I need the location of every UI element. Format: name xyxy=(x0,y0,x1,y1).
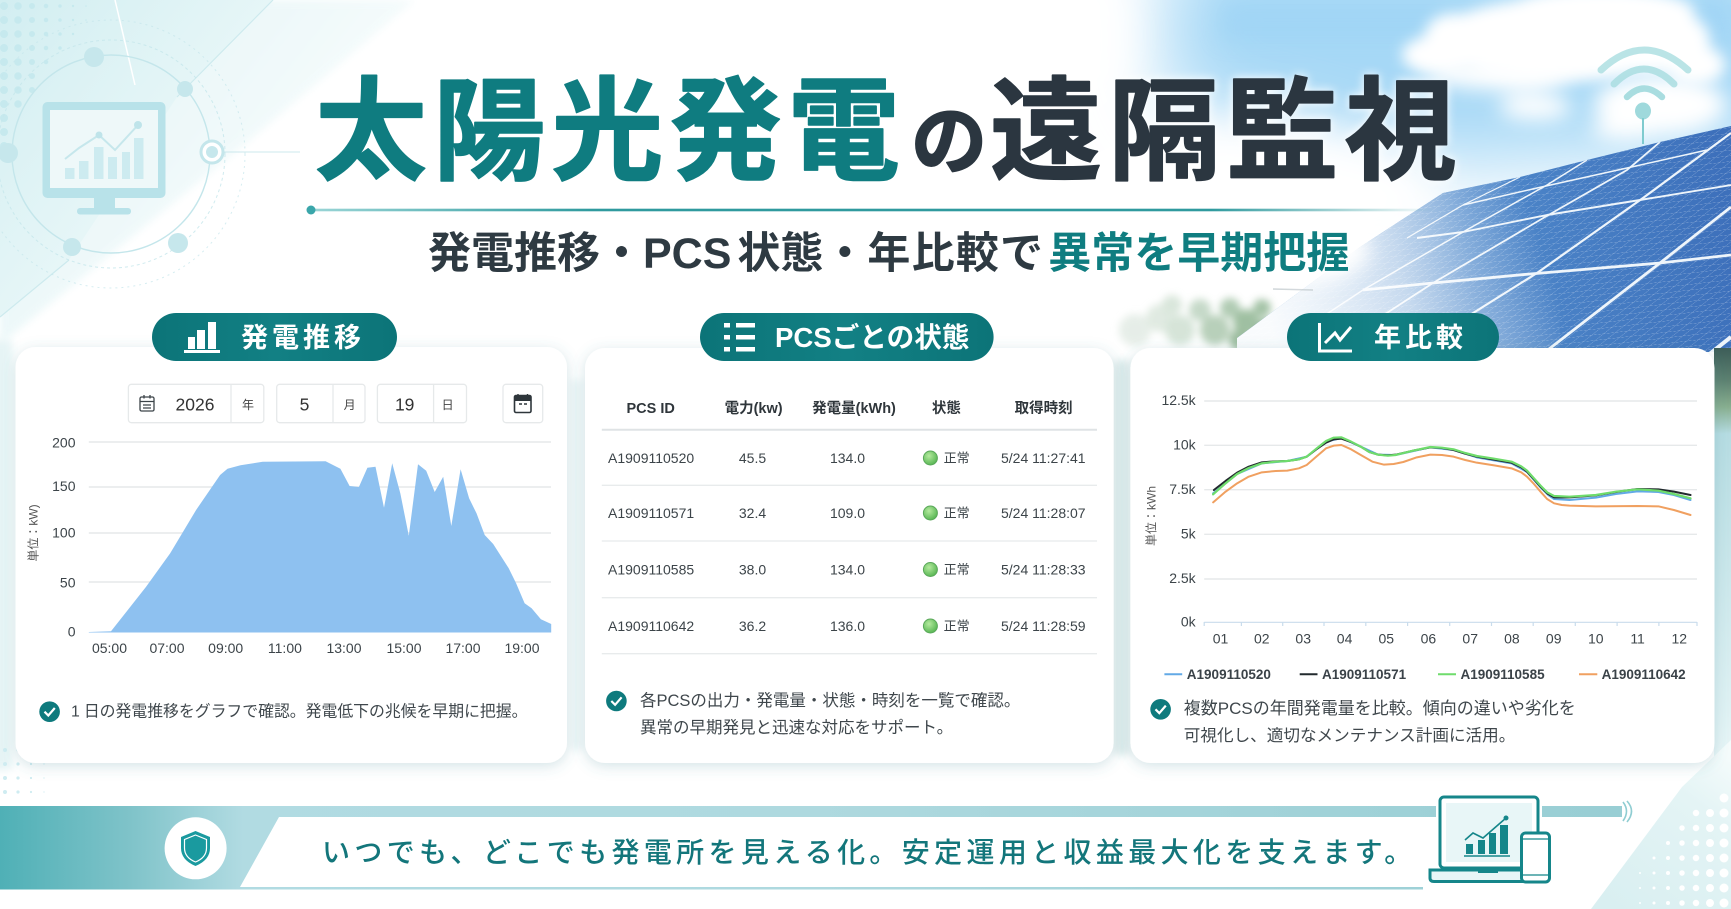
panel: PCS status xyxy=(585,313,1114,763)
line chart: annual generation: 02 xyxy=(1254,630,1270,646)
title rule xyxy=(306,206,1436,214)
trees xyxy=(1119,295,1290,351)
line chart: annual generation: 12.5k xyxy=(1161,392,1197,408)
row 4 xyxy=(608,618,1086,634)
area chart: daily generation: 11:00 xyxy=(268,640,302,656)
status table: 電力(kw) xyxy=(725,400,783,417)
row 2: 109.0 xyxy=(830,505,865,521)
icon: small calendar xyxy=(140,395,154,411)
icon: wifi signal xyxy=(1601,50,1688,144)
solar panels xyxy=(1230,120,1731,356)
dot grid: top left xyxy=(4,6,86,150)
legend: A1909110520 xyxy=(1187,667,1271,682)
legend: A1909110585 xyxy=(1460,667,1545,682)
icon: shield xyxy=(165,817,227,879)
area chart: daily generation: 19:00 xyxy=(504,640,540,656)
status table: 取得時刻 xyxy=(1015,400,1073,417)
icon: signal arcs xyxy=(1623,801,1632,822)
card background xyxy=(585,348,1114,763)
card background xyxy=(1130,348,1714,763)
area chart: daily generation: 15:00 xyxy=(386,640,422,656)
row 4: 5/24 11:28:59 xyxy=(1001,618,1086,634)
area chart: daily generation: 07:00 xyxy=(149,640,185,656)
date selector: 5 xyxy=(300,394,309,414)
note: yearly comparison: 複数PCSの年間発電量を比較。傾向の違いや劣化を xyxy=(1184,699,1576,718)
note: yearly comparison: 可視化し、適切なメンテナンス計画に活用。 xyxy=(1184,726,1515,745)
corner wedge: bottom right xyxy=(1591,740,1731,909)
row 1: 5/24 11:27:41 xyxy=(1001,450,1086,466)
row 1: 45.5 xyxy=(739,450,766,466)
side tint strips xyxy=(0,340,1130,770)
line chart: annual generation: 01 xyxy=(1213,630,1228,646)
row 1: 134.0 xyxy=(830,450,865,466)
area chart: daily generation: 単位：kW) xyxy=(26,504,40,562)
row 2: 正常 xyxy=(944,506,970,520)
area chart: daily generation: 09:00 xyxy=(208,640,243,656)
row 4: 正常 xyxy=(944,618,970,634)
date selector: 19 xyxy=(395,394,414,414)
status table xyxy=(602,399,1097,654)
area chart: daily generation: 05:00 xyxy=(92,640,127,656)
row 4: 136.0 xyxy=(830,618,865,634)
title: 太陽光発電 xyxy=(315,42,906,204)
row 3 xyxy=(608,562,1086,578)
status table: 状態 xyxy=(932,399,961,417)
row 3: 5/24 11:28:33 xyxy=(1001,562,1086,578)
legend: A1909110571 xyxy=(1322,667,1407,682)
area chart: daily generation: 17:00 xyxy=(445,640,481,656)
area chart: daily generation: 100 xyxy=(52,524,76,540)
data lines xyxy=(1213,437,1691,515)
title xyxy=(315,42,1463,204)
line chart: annual generation: 単位：kWh xyxy=(1144,486,1158,546)
title: の xyxy=(911,80,987,190)
area chart: daily generation: 13:00 xyxy=(326,640,362,656)
banner band xyxy=(0,806,1622,890)
heading pill: PCS status xyxy=(700,313,994,361)
legend: A1909110642 xyxy=(1602,667,1686,682)
line chart: annual generation xyxy=(1144,392,1697,682)
area chart: daily generation: 0 xyxy=(68,624,76,640)
line chart: annual generation: 04 xyxy=(1337,630,1353,646)
line chart: annual generation: 5k xyxy=(1181,526,1197,542)
note: PCS status xyxy=(606,691,1020,737)
note: PCS status: 異常の早期発見と迅速な対応をサポート。 xyxy=(640,718,953,737)
row 3: 38.0 xyxy=(739,562,766,578)
row 3: 正常 xyxy=(944,562,970,577)
date selector: 2026 xyxy=(176,394,214,414)
row 2: 32.4 xyxy=(739,505,766,521)
icon: calendar button xyxy=(514,394,531,412)
line chart: annual generation: 06 xyxy=(1421,630,1436,646)
line chart: annual generation: 10k xyxy=(1173,437,1197,453)
banner text: いつでも、どこでも発電所を見える化。安定運用と収益最大化を支えます。 xyxy=(322,837,1417,868)
row 1: A1909110520 xyxy=(608,450,694,466)
card background xyxy=(16,347,567,763)
date selector xyxy=(128,384,543,423)
line chart: annual generation: 2.5k xyxy=(1169,570,1197,586)
heading pill: yearly comparison: 年比較 xyxy=(1374,323,1467,353)
row 4: A1909110642 xyxy=(608,618,694,634)
subtitle: 発電推移・PCS状態・年比較で異常を早期把握 xyxy=(428,230,1349,278)
date selector: 月 xyxy=(344,398,356,412)
area chart: daily generation: 50 xyxy=(60,574,76,590)
area chart: daily generation: 150 xyxy=(52,478,76,494)
dot grid: bottom left xyxy=(5,750,44,800)
date selector: 年 xyxy=(242,398,254,412)
line chart: annual generation: 08 xyxy=(1504,630,1520,646)
panel: power trend xyxy=(16,313,567,763)
line chart: annual generation: 0k xyxy=(1181,614,1197,630)
panel: yearly comparison xyxy=(1130,313,1714,763)
line chart: annual generation: 05 xyxy=(1379,630,1394,646)
title: 遠隔監視 xyxy=(990,42,1463,204)
heading pill: yearly comparison xyxy=(1287,313,1499,361)
row 3: 134.0 xyxy=(830,562,865,578)
line chart: annual generation: 07 xyxy=(1462,630,1478,646)
icon: laptop and phone xyxy=(1430,795,1550,882)
icon: monitor xyxy=(42,102,166,214)
note: yearly comparison xyxy=(1150,699,1576,745)
network ring xyxy=(0,20,300,288)
heading pill: power trend: 発電推移 xyxy=(241,323,365,353)
status table: PCS ID xyxy=(627,401,675,417)
status table: 発電量(kWh) xyxy=(812,399,896,417)
line chart: annual generation: 7.5k xyxy=(1169,481,1197,497)
area chart: daily generation xyxy=(26,435,551,656)
row 2: 5/24 11:28:07 xyxy=(1001,505,1086,521)
row 4: 36.2 xyxy=(739,618,766,634)
date selector: 日 xyxy=(442,398,454,412)
legend xyxy=(1164,667,1686,682)
right edge strip xyxy=(1714,348,1731,803)
note: PCS status: 各PCSの出力・発電量・状態・時刻を一覧で確認。 xyxy=(640,691,1020,710)
line chart: annual generation: 03 xyxy=(1295,630,1311,646)
row 2 xyxy=(608,505,1086,521)
row 1: 正常 xyxy=(944,450,970,466)
note: power trend: 1 日の発電推移をグラフで確認。発電低下の兆候を早期に把握。 xyxy=(71,702,527,720)
heading pill: power trend xyxy=(152,313,397,361)
line chart: annual generation: 09 xyxy=(1546,630,1562,646)
heading pill: PCS status: PCSごとの状態 xyxy=(775,322,969,353)
line chart: annual generation: 10 xyxy=(1588,630,1604,646)
row 2: A1909110571 xyxy=(608,505,694,521)
corner wedge: top left xyxy=(0,0,415,345)
row 1 xyxy=(608,450,1086,466)
row 3: A1909110585 xyxy=(608,562,694,578)
line chart: annual generation: 11 xyxy=(1630,630,1645,646)
sky background xyxy=(1030,0,1731,265)
area chart: daily generation: 200 xyxy=(52,435,76,451)
line chart: annual generation: 12 xyxy=(1672,630,1687,646)
bottom banner xyxy=(0,795,1632,890)
